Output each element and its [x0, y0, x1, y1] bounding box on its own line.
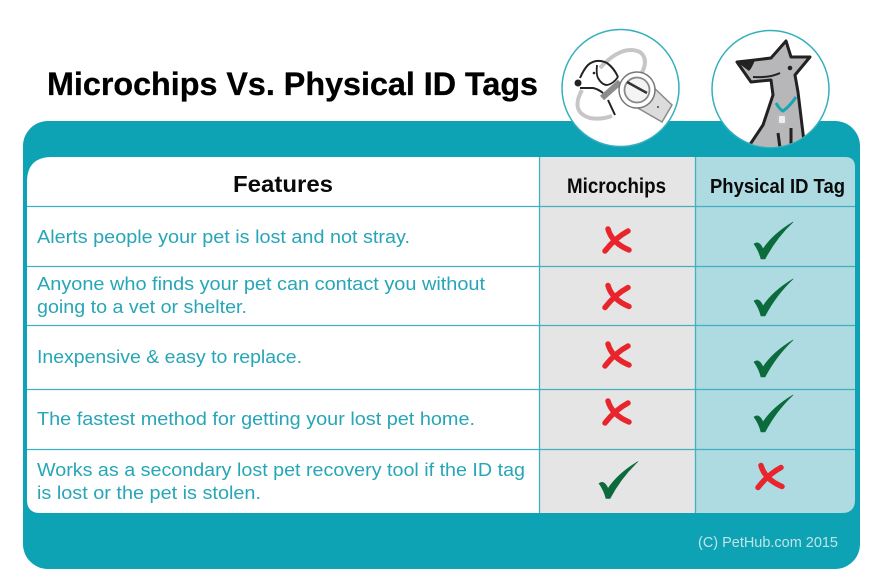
heading: Microchips: Microchips — [567, 175, 666, 198]
icon: red cross row 2 — [605, 286, 629, 308]
icon: red cross row 5 — [758, 466, 782, 488]
icon: red cross row 3 — [605, 344, 629, 366]
heading: Features: Features — [233, 171, 333, 197]
icon: green check row 2 — [754, 279, 793, 316]
feature 2: Anyone who finds your pet can contact you without — [37, 274, 485, 294]
panel: comparison table — [27, 157, 855, 513]
icon: dog wearing ID tag — [712, 30, 829, 150]
feature 2: going to a vet or shelter. — [37, 297, 247, 317]
feature 1: Alerts people your pet is lost and not stray. — [37, 227, 410, 247]
icon: red cross row 4 — [605, 401, 629, 423]
icon: dog with microchip scanner — [562, 30, 679, 146]
panel: teal background — [23, 121, 860, 569]
feature 4: The fastest method for getting your lost pet home. — [37, 409, 475, 429]
icon: red cross row 1 — [605, 229, 629, 251]
icon: green check row 1 — [754, 222, 793, 259]
icon: green check row 5 — [599, 462, 638, 498]
icon: green check row 4 — [754, 395, 793, 432]
feature 5: is lost or the pet is stolen. — [37, 483, 261, 503]
credit: (C) PetHub.com 2015 — [698, 534, 838, 551]
icon: green check row 3 — [754, 340, 793, 377]
feature 5: Works as a secondary lost pet recovery tool if the ID tag — [37, 460, 525, 480]
feature 3: Inexpensive & easy to replace. — [37, 347, 302, 367]
title: Microchips Vs. Physical ID Tags — [47, 66, 538, 102]
heading: Physical ID Tag: Physical ID Tag — [710, 176, 845, 198]
